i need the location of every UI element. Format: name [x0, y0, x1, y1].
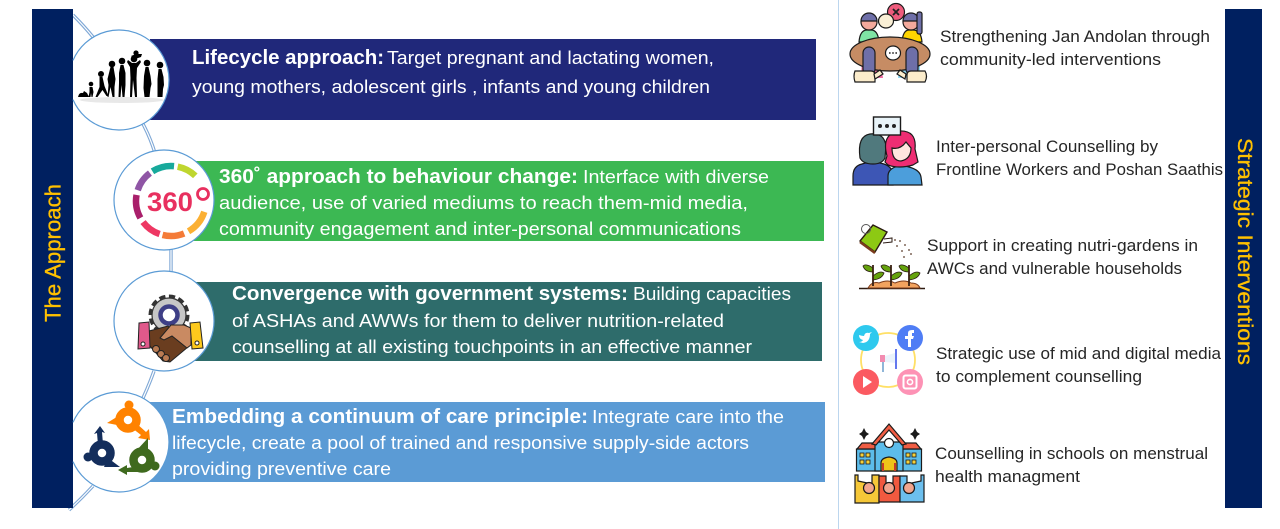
- icon: 360 degree ring: 360: [147, 187, 193, 217]
- panel: strategic interventions sidebar: [1225, 9, 1262, 508]
- text: nutri-gardens: AWCs and vulnerable households: [927, 260, 1182, 278]
- heading: strategic interventions: Strategic Interventions: [1233, 138, 1256, 365]
- intervention: inter-personal counselling: [853, 117, 1223, 185]
- icon: school with students: [855, 424, 924, 503]
- text: mid and digital media: to complement counselling: [936, 368, 1142, 386]
- text: schools: [935, 445, 1208, 486]
- text: 360 approach: Interface with diverse: [583, 167, 769, 187]
- text: convergence: Convergence with government systems:: [232, 283, 628, 305]
- icon: two people talking: [853, 117, 922, 185]
- icon: lifecycle silhouettes: [73, 30, 169, 130]
- text: convergence: counselling at all existing touchpoints in an effective manner: [232, 337, 752, 357]
- text: 360 approach: [219, 165, 769, 239]
- heading: the approach: The Approach: [40, 184, 66, 322]
- text: lifecycle approach: [192, 47, 714, 97]
- text: inter-personal counselling: Inter-personal Counselling by: [936, 138, 1159, 156]
- icon: 360 degree ring: [114, 150, 219, 250]
- text: 360 approach: audience, use of varied mediums to reach them-mid media,: [219, 193, 748, 213]
- panel: 360 degree approach: [190, 161, 824, 241]
- text: convergence: [232, 283, 791, 357]
- intervention: schools: [855, 424, 1208, 503]
- icon: community meeting: [850, 4, 930, 82]
- intervention: mid and digital media: [853, 325, 1222, 395]
- text: lifecycle approach: young mothers, adolescent girls , infants and young children: [192, 77, 710, 97]
- text: convergence: Building capacities: [633, 284, 791, 304]
- text: jan andolan: Strengthening Jan Andolan through: [940, 28, 1210, 46]
- text: schools: health managment: [935, 468, 1080, 486]
- text: continuum of care: Embedding a continuum of care principle:: [172, 406, 588, 428]
- text: 360 approach: community engagement and inter-personal communications: [219, 219, 741, 239]
- text: continuum of care: providing preventive care: [172, 459, 391, 479]
- text: continuum of care: Integrate care into the: [592, 407, 784, 427]
- text: mid and digital media: [936, 345, 1222, 386]
- text: nutri-gardens: [927, 237, 1198, 278]
- text: jan andolan: [940, 28, 1210, 69]
- text: inter-personal counselling: Frontline Workers and Poshan Saathis: [936, 161, 1223, 179]
- panel: the approach sidebar: [32, 9, 73, 508]
- intervention: nutri-gardens: [859, 224, 1198, 288]
- text: continuum of care: [172, 406, 784, 479]
- text: nutri-gardens: Support in creating nutri-gardens in: [927, 237, 1198, 255]
- panel: continuum of care: [150, 402, 825, 482]
- icon: continuum of care cycle: [73, 392, 169, 492]
- panel: lifecycle approach: [150, 39, 816, 120]
- panel: convergence with government systems: [190, 282, 822, 361]
- text: schools: Counselling in schools on menstrual: [935, 445, 1208, 463]
- text: lifecycle approach: Target pregnant and lactating women,: [387, 48, 714, 68]
- icon: gear and handshake: [114, 271, 214, 371]
- text: continuum of care: lifecycle, create a pool of trained and responsive supply-side actors: [172, 433, 749, 453]
- text: jan andolan: community-led interventions: [940, 51, 1161, 69]
- intervention: jan andolan: [850, 4, 1210, 82]
- text: convergence: of ASHAs and AWWs for them to deliver nutrition-related: [232, 311, 724, 331]
- text: lifecycle approach: Lifecycle approach:: [192, 47, 384, 69]
- text: mid and digital media: Strategic use of mid and digital media: [936, 345, 1222, 363]
- text: inter-personal counselling: [936, 138, 1223, 179]
- icon: watering can and seedlings: [859, 224, 925, 288]
- icon: social media megaphone: [853, 325, 923, 395]
- text: 360 approach: 360˚ approach to behaviour change:: [219, 165, 578, 188]
